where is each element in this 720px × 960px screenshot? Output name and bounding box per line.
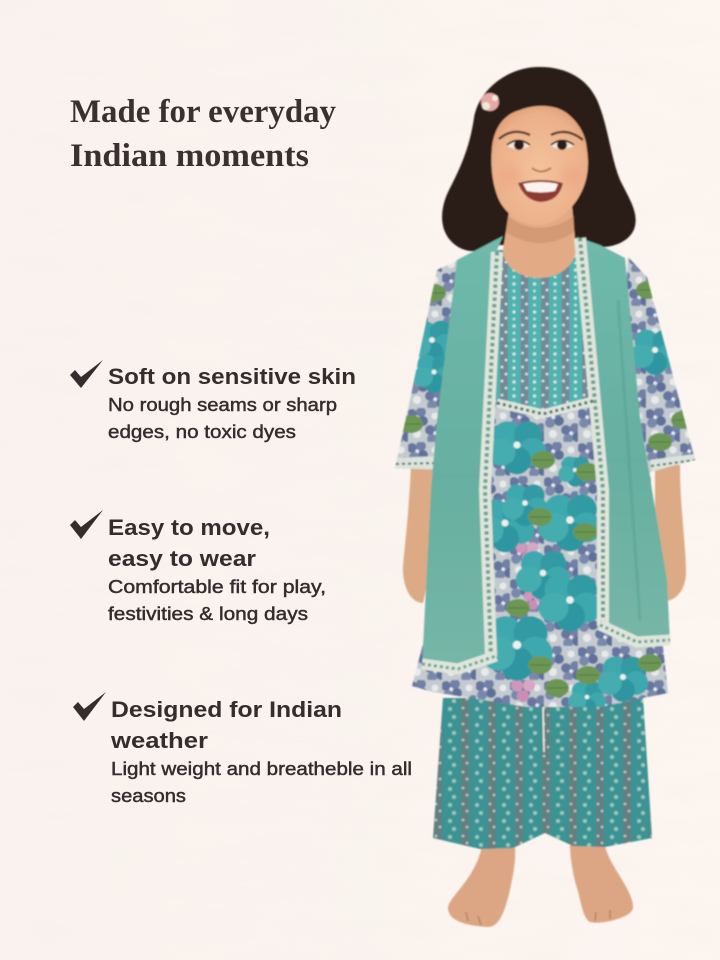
feature: easy to move, easy to wear (70, 510, 326, 624)
title: Made for everyday (70, 94, 336, 130)
feature description (111, 759, 412, 806)
hair clip (481, 93, 499, 111)
neck shadow (506, 216, 574, 243)
kurta: striped yoke (495, 250, 600, 417)
dupatta: left panel (422, 236, 503, 673)
feature heading: easy to wear (108, 546, 256, 571)
hair (442, 67, 636, 251)
feature heading (108, 515, 270, 571)
arm: left (403, 465, 434, 603)
smile (518, 180, 563, 202)
eyes (499, 132, 583, 150)
cheeks (499, 165, 583, 187)
feature description: No rough seams or sharp (108, 395, 337, 415)
lace trim: dupatta edges (422, 238, 670, 669)
feature heading (110, 697, 342, 753)
feature heading: Soft on sensitive skin (108, 364, 356, 389)
neck (503, 205, 576, 278)
nose (532, 168, 551, 172)
illustration: smiling girl in teal kurta set (390, 67, 700, 927)
feature description (108, 395, 337, 442)
palazzo pants (433, 698, 652, 849)
icon: check mark (73, 692, 106, 721)
feature description: Comfortable fit for play, (108, 577, 326, 597)
feature description: edges, no toxic dyes (108, 422, 296, 442)
feature description: Light weight and breatheble in all (111, 759, 412, 779)
title (70, 94, 336, 174)
kurta: lower floral panel (405, 395, 675, 716)
feature description: festivities & long days (108, 604, 308, 624)
feature description: seasons (111, 786, 186, 806)
feature description (108, 577, 326, 624)
sleeve: right (626, 257, 696, 472)
arm: right (655, 465, 686, 601)
feature heading: Easy to move, (108, 515, 270, 540)
sleeve: left (394, 260, 458, 470)
foot: right (570, 844, 633, 923)
feature: designed for Indian weather (73, 692, 412, 806)
foot: left (448, 846, 515, 927)
dupatta: right panel (577, 237, 670, 643)
title: Indian moments (70, 138, 309, 174)
feature heading: Designed for Indian (111, 697, 342, 722)
feature heading: weather (110, 728, 208, 753)
face (491, 106, 588, 225)
icon: check mark (70, 510, 103, 539)
feature: soft on sensitive skin (70, 360, 356, 442)
icon: check mark (70, 360, 103, 388)
